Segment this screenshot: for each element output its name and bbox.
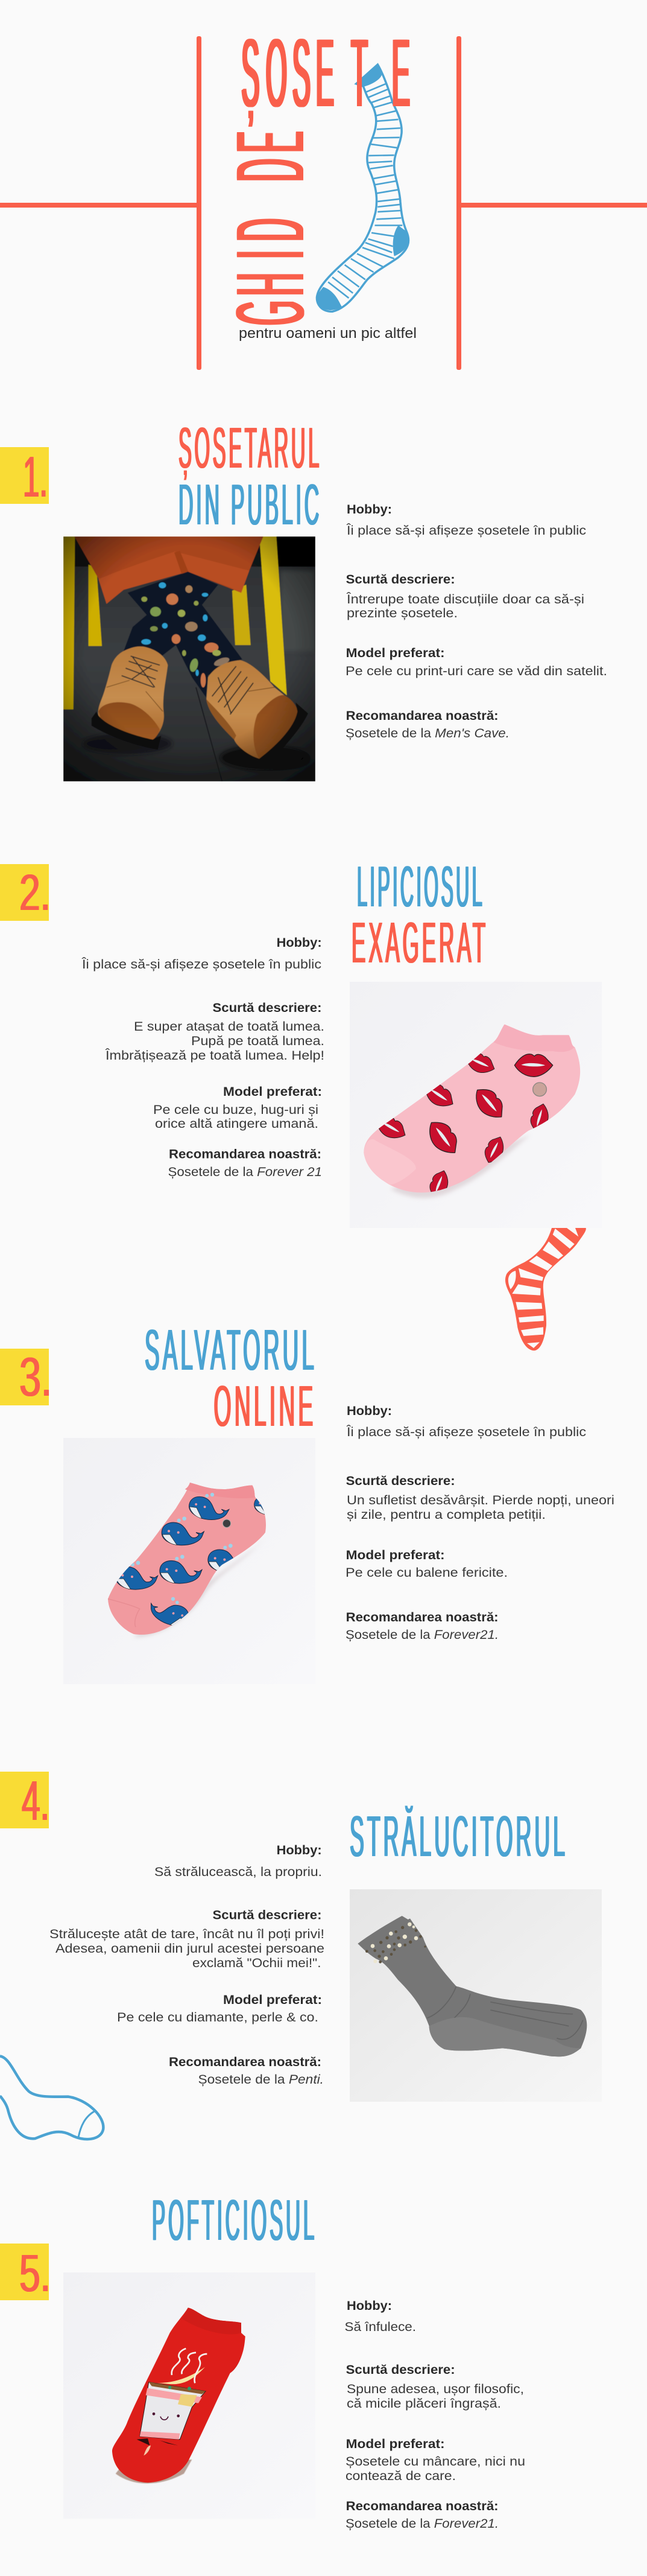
- info text: Pe cele cu balene fericite.: [346, 1566, 508, 1580]
- info text: Scurtă descriere:: [212, 1001, 322, 1015]
- info text: Îi place să-și afișeze șosetele în public: [346, 1425, 586, 1439]
- info text: Pupă pe toată lumea.: [191, 1034, 324, 1048]
- info text: Hobby:: [347, 2299, 392, 2313]
- title: ghid de: GHID DE: [216, 132, 324, 325]
- info text: Îi place să-și afișeze șosetele în public: [81, 958, 321, 972]
- info text: [81, 936, 324, 1179]
- section 2: lipiciosul exagerat: [0, 854, 602, 1350]
- info text: și zile, pentru a completa petiții.: [347, 1508, 546, 1522]
- frame line: right vertical: [456, 36, 461, 370]
- icon: blue outline sock: [0, 2056, 103, 2139]
- number badge 4: [0, 1769, 49, 1832]
- frame line: right horizontal: [461, 203, 647, 208]
- number badge 1: [0, 445, 49, 509]
- info text: Scurtă descriere:: [346, 573, 455, 587]
- heading: [145, 1318, 317, 1439]
- info text: Scurtă descriere:: [346, 1474, 455, 1488]
- number badge 2: 2.: [19, 864, 51, 921]
- info text: Pe cele cu buze, hug-uri și: [153, 1103, 318, 1117]
- number badge 2: [0, 864, 51, 921]
- info text: Spune adesea, ușor filosofic,: [347, 2382, 524, 2396]
- frame line: left horizontal: [0, 203, 197, 208]
- section 1: șosetarul din public: DIN PUBLIC: [178, 472, 322, 537]
- info text: [345, 2299, 525, 2531]
- heading: [352, 854, 488, 975]
- info text: Șosetele de la Penti.: [198, 2073, 324, 2087]
- info text: Model preferat:: [346, 1548, 445, 1562]
- info text: Hobby:: [347, 1404, 392, 1418]
- info text: Șosetele de la Forever21.: [346, 2517, 499, 2531]
- title: șosete: ȘOSETE: [241, 19, 410, 127]
- info text: contează de care.: [346, 2469, 456, 2483]
- info text: Să înfulece.: [345, 2320, 416, 2334]
- section 3: salvatorul online: ONLINE: [213, 1374, 316, 1439]
- info text: Hobby:: [347, 503, 392, 517]
- info text: Șosetele cu mâncare, nici nu: [346, 2455, 525, 2469]
- info text: Recomandarea noastră:: [346, 1611, 499, 1624]
- info text: Hobby:: [277, 1843, 322, 1857]
- info text: Îi place să-și afișeze șosetele în public: [346, 524, 586, 538]
- subtitle: pentru oameni un pic altfel: [239, 325, 417, 342]
- header: [0, 19, 647, 370]
- info text: Hobby:: [277, 936, 322, 950]
- info text: Șosetele de la Forever 21: [168, 1165, 322, 1179]
- section 1: șosetarul din public: ȘOSETARUL: [178, 416, 322, 480]
- info text: Strălucește atât de tare, încât nu îl poți privi!: [49, 1927, 324, 1941]
- heading: [178, 416, 322, 537]
- info text: [346, 1404, 614, 1642]
- info text: E super atașat de toată lumea.: [134, 1020, 324, 1034]
- section 5: pofticiosul: POFTICIOSUL: [152, 2188, 317, 2253]
- info text: Model preferat:: [346, 646, 445, 660]
- section 1: șosetarul din public: [0, 416, 607, 781]
- info text: Șosetele de la Men's Cave.: [346, 727, 510, 740]
- icon: striped blue sock: [316, 65, 409, 311]
- section 3: salvatorul online: SALVATORUL: [145, 1318, 317, 1382]
- info text: Model preferat:: [346, 2437, 445, 2451]
- info text: orice altă atingere umană.: [155, 1117, 318, 1131]
- frame line: left vertical: [197, 36, 201, 370]
- info text: exclamă "Ochii mei!".: [192, 1956, 321, 1970]
- info text: Pe cele cu diamante, perle & co.: [117, 2011, 318, 2024]
- info text: Recomandarea noastră:: [346, 2499, 499, 2513]
- icon: coral striped sock: [505, 1228, 586, 1350]
- photo: pink socks with lips: [350, 982, 580, 1201]
- number badge 5: 5.: [19, 2244, 51, 2303]
- info text: Pe cele cu print-uri care se văd din satelit.: [346, 664, 607, 678]
- photo: crossed legs with polka dot socks and brogues: [63, 536, 315, 781]
- info text: Întrerupe toate discuțiile doar ca să-și: [346, 593, 584, 606]
- info text: Scurtă descriere:: [212, 1908, 322, 1922]
- info text: Să strălucească, la propriu.: [154, 1865, 322, 1879]
- photo: grey sock with pearls: [350, 1889, 602, 2102]
- number badge 3: [0, 1347, 52, 1408]
- section 3: salvatorul online: [0, 1329, 614, 1641]
- info text: Model preferat:: [223, 1085, 322, 1099]
- number badge 1: 1.: [23, 445, 48, 509]
- info text: Recomandarea noastră:: [346, 709, 499, 723]
- info text: Adesea, oamenii din jurul acestei persoane: [55, 1942, 324, 1956]
- number badge 4: 4.: [22, 1769, 49, 1832]
- info text: [49, 1843, 324, 2087]
- info text: Model preferat:: [223, 1993, 322, 2007]
- info text: că micile plăceri îngrașă.: [347, 2397, 501, 2411]
- info text: Un sufletist desăvârșit. Pierde nopți, uneori: [347, 1493, 614, 1507]
- info text: Îmbrățișează pe toată lumea. Help!: [105, 1049, 324, 1063]
- info text: Șosetele de la Forever21.: [346, 1628, 499, 1642]
- number badge 5: [0, 2244, 51, 2303]
- info text: Recomandarea noastră:: [169, 2055, 321, 2069]
- number badge 3: 3.: [19, 1347, 52, 1408]
- photo: pink socks with whales: [63, 1438, 266, 1640]
- info text: Recomandarea noastră:: [169, 1148, 321, 1161]
- photo: red sock with noodle cup: [63, 2272, 315, 2519]
- info text: prezinte șosetele.: [347, 606, 458, 620]
- info text: Scurtă descriere:: [346, 2363, 455, 2377]
- section 5: pofticiosul: [0, 2188, 525, 2531]
- info text: [346, 503, 607, 740]
- section 4: strălucitorul: [0, 1769, 602, 2139]
